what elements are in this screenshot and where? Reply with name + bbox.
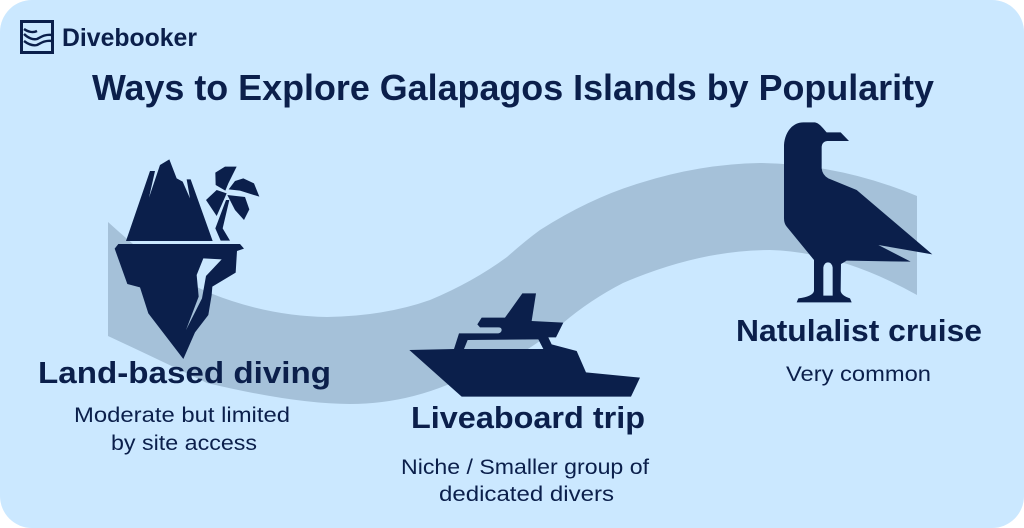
wave band [108, 163, 917, 404]
description: Moderate but limited [74, 403, 290, 427]
description: Niche / Smaller group of [401, 455, 649, 479]
icon: liveaboard boat [409, 293, 640, 397]
title: Ways to Explore Galapagos Islands by Popularity [92, 67, 934, 108]
label: liveaboard trip: dedicated divers [439, 482, 614, 506]
label: land-based diving [38, 355, 331, 455]
logo [22, 22, 197, 52]
label: land-based diving: by site access [111, 431, 257, 455]
heading: Natulalist cruise [736, 313, 982, 348]
icon: waves logo [22, 22, 52, 52]
description: Very common [786, 362, 931, 386]
icon: island iceberg with palm [115, 159, 259, 359]
heading: Liveaboard trip [411, 400, 645, 435]
icon: seabird [784, 122, 932, 302]
label: liveaboard trip [401, 400, 649, 506]
label: naturalist cruise [736, 313, 982, 386]
heading: Land-based diving [38, 355, 331, 390]
brand name: Divebooker [62, 24, 197, 52]
